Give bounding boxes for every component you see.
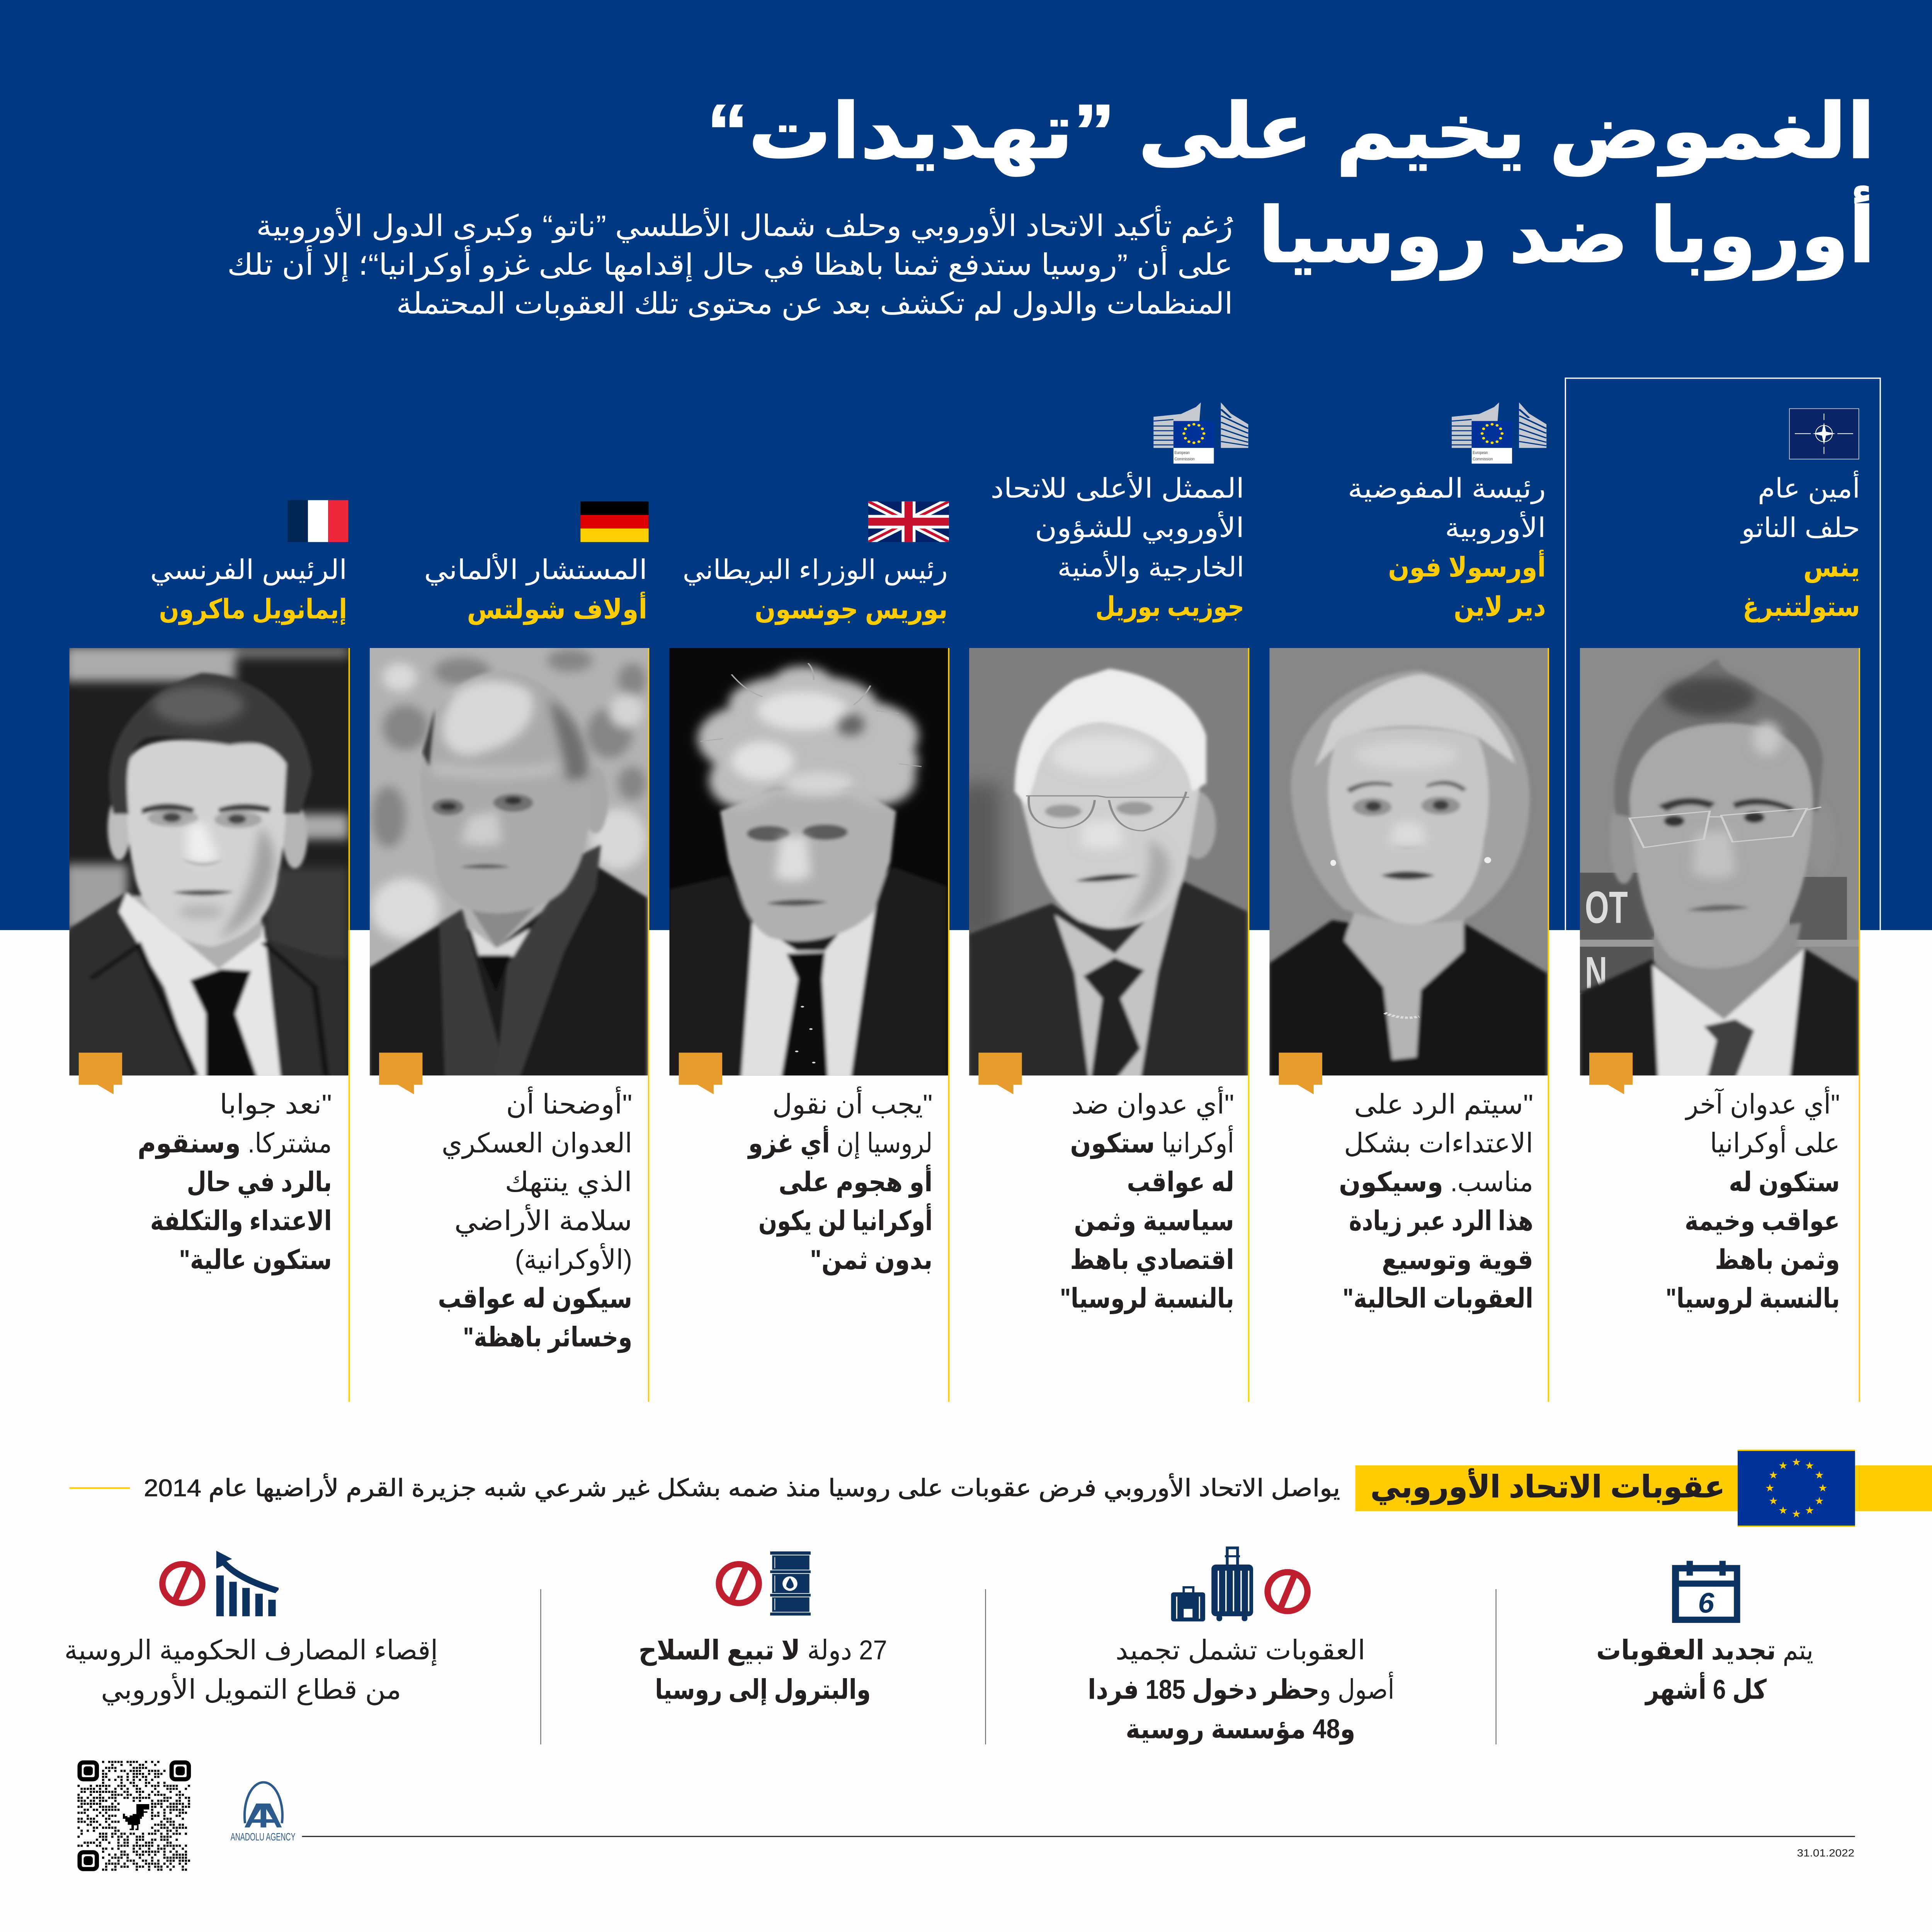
portrait: von der Leyen — [1266, 644, 1552, 1079]
quote: Borrell: "أي عدوان ضد — [1071, 1087, 1234, 1121]
position and name: Borrell: جوزيب بوريل — [1095, 592, 1244, 622]
icon: quote bubble (Borrell) — [978, 1053, 1022, 1094]
title — [707, 89, 1875, 281]
section band: EU sanctions — [1355, 1450, 1932, 1527]
quote: Stoltenberg: بالنسبة لروسيا" — [1666, 1284, 1840, 1315]
position and name: Borrell — [991, 472, 1244, 622]
quote: Scholz: وخسائر باهظة" — [463, 1322, 632, 1353]
icon: calendar — [1672, 1561, 1740, 1623]
quote: von der Leyen: الاعتداءات بشكل — [1344, 1128, 1533, 1158]
quote: Scholz: "أوضحنا أن — [506, 1087, 632, 1121]
quote: Scholz: سيكون له عواقب — [438, 1284, 632, 1314]
icon: luggage with prohibition sign — [1171, 1548, 1308, 1621]
subtitle text block: المنظمات والدول لم تكشف بعد عن محتوى تلك العقوبات المحتملة — [396, 287, 1233, 321]
position and name: Johnson — [683, 555, 948, 625]
quote: von der Leyen: "سيتم الرد على — [1354, 1090, 1533, 1121]
highlight frame: NATO column — [1565, 378, 1880, 930]
text: asset freeze: العقوبات تشمل تجميد — [1116, 1635, 1366, 1666]
text: excluding Russian banks: من قطاع التمويل الأوروبي — [101, 1673, 401, 1706]
section heading: عقوبات الاتحاد الأوروبي — [1371, 1468, 1725, 1505]
text: no arms and oil sales: 27 دولة لا تبيع السلاح — [639, 1635, 887, 1666]
quote: Macron: الاعتداء والتكلفة — [150, 1206, 332, 1237]
position and name: Borrell: الخارجية والأمنية — [1058, 551, 1244, 583]
date: 31.01.2022 — [1797, 1847, 1854, 1859]
position and name: von der Leyen: دير لاين — [1454, 592, 1546, 622]
quote: Stoltenberg: ستكون له — [1729, 1167, 1840, 1198]
portrait: Stoltenberg: N — [1585, 948, 1607, 998]
portrait: Stoltenberg — [1575, 644, 1867, 1079]
text: asset freeze: و48 مؤسسة روسية — [1126, 1714, 1355, 1745]
position and name: von der Leyen — [1348, 474, 1546, 622]
text: no arms and oil sales: والبترول إلى روسيا — [655, 1675, 871, 1706]
position and name: Scholz: أولاف شولتس — [467, 591, 647, 625]
portrait: Stoltenberg: OT — [1585, 882, 1628, 933]
text: no arms and oil sales — [639, 1635, 887, 1706]
icon: quote bubble (Stoltenberg) — [1589, 1053, 1633, 1094]
position and name: Johnson: رئيس الوزراء البريطاني — [683, 555, 948, 586]
quote: Macron — [138, 1090, 332, 1276]
text: sanctions renewal — [1596, 1635, 1813, 1705]
quote: Johnson: لروسيا إن أي غزو — [747, 1125, 932, 1159]
dividers — [541, 1589, 1496, 1744]
quote: Macron: ستكون عالية" — [179, 1245, 332, 1276]
QR code — [78, 1762, 191, 1870]
icon: quote bubble (Scholz) — [379, 1053, 422, 1094]
position and name: Stoltenberg: ستولتنبرغ — [1743, 592, 1860, 622]
quote: Stoltenberg: عواقب وخيمة — [1685, 1206, 1840, 1237]
text: sanctions renewal: كل 6 أشهر — [1645, 1672, 1767, 1705]
quote: Johnson: "يجب أن نقول — [772, 1087, 932, 1121]
quote: Stoltenberg: وثمن باهظ — [1715, 1245, 1840, 1276]
quote: Macron: مشتركا. وسنقوم — [138, 1128, 332, 1159]
text: asset freeze — [1088, 1635, 1395, 1745]
position and name: Stoltenberg: حلف الناتو — [1740, 513, 1860, 544]
portrait: Johnson — [666, 644, 956, 1079]
quote: Johnson: أوكرانيا لن يكون — [759, 1203, 932, 1237]
Anadolu Agency logo — [231, 1782, 296, 1843]
quote: von der Leyen — [1339, 1090, 1533, 1314]
icon: European Commission logo (Borrell column) — [1153, 402, 1248, 464]
position and name: Borrell: الأوروبي للشؤون — [1035, 511, 1244, 544]
quote: Scholz: العدوان العسكري — [442, 1128, 632, 1159]
text: sanctions renewal: يتم تجديد العقوبات — [1596, 1635, 1813, 1666]
yellow dash — [70, 1487, 130, 1489]
icon: falling bars with arrow and prohibition sign — [162, 1551, 279, 1616]
icon: French flag — [288, 500, 348, 542]
icon: European Commission logo (von der Leyen column) — [1452, 402, 1546, 464]
quote: von der Leyen: مناسب. وسيكون — [1339, 1167, 1533, 1198]
footer rule — [302, 1836, 1855, 1837]
quote: Macron: "نعد جوابا — [219, 1090, 332, 1121]
quote: Stoltenberg: على أوكرانيا — [1710, 1125, 1840, 1159]
icon: European Commission logo (Borrell column): European — [1175, 450, 1190, 455]
quote: Borrell: بالنسبة لروسيا" — [1060, 1284, 1234, 1315]
Anadolu Agency logo: ANADOLU AGENCY — [231, 1831, 296, 1843]
quote: Borrell: أوكرانيا ستكون — [1070, 1125, 1234, 1159]
icon: quote bubble (Macron) — [79, 1053, 122, 1094]
position and name: Borrell: الممثل الأعلى للاتحاد — [991, 472, 1244, 504]
portrait: Scholz — [366, 644, 655, 1079]
text: asset freeze: أصول وحظر دخول 185 فردا — [1088, 1672, 1395, 1706]
position and name: Stoltenberg: ينس — [1803, 553, 1860, 583]
subtitle text block: على أن ”روسيا ستدفع ثمنا باهظا في حال إقدامها على غزو أوكرانيا“؛ إلا أن تلك — [227, 245, 1233, 282]
quote: Macron: بالرد في حال — [187, 1167, 332, 1198]
position and name: von der Leyen: رئيسة المفوضية — [1348, 474, 1546, 505]
position and name: Stoltenberg: أمين عام — [1758, 471, 1860, 505]
quote: Johnson — [747, 1087, 932, 1276]
icon: European Commission logo (von der Leyen column): European — [1473, 450, 1488, 455]
icon: European Commission logo (Borrell column): Commission — [1175, 457, 1195, 462]
quote: von der Leyen: هذا الرد عبر زيادة — [1349, 1206, 1533, 1236]
column rules — [349, 648, 1859, 1402]
quote: Johnson: أو هجوم على — [779, 1164, 932, 1198]
title: الغموض يخيم على ”تهديدات“ — [707, 89, 1875, 176]
icon: quote bubble (von der Leyen) — [1279, 1053, 1322, 1094]
quote: Stoltenberg: "أي عدوان آخر — [1685, 1087, 1840, 1121]
quote: Stoltenberg — [1666, 1087, 1840, 1315]
blue header panel — [0, 0, 1932, 930]
quote: von der Leyen: قوية وتوسيع — [1382, 1245, 1533, 1276]
position and name: Johnson: بوريس جونسون — [755, 594, 948, 625]
position and name: Stoltenberg — [1740, 471, 1860, 622]
subtitle text block — [227, 206, 1233, 321]
icon: EU flag — [1738, 1450, 1855, 1527]
quote: Borrell — [1060, 1087, 1234, 1315]
subtitle text block: رُغم تأكيد الاتحاد الأوروبي وحلف شمال الأطلسي ”ناتو“ وكبرى الدول الأوروبية — [256, 206, 1233, 243]
quote: Scholz: الذي ينتهك — [505, 1167, 632, 1198]
icon: European Commission logo (von der Leyen column): Commission — [1473, 457, 1493, 462]
position and name: von der Leyen: أورسولا فون — [1388, 549, 1546, 583]
quote: Borrell: له عواقب — [1127, 1167, 1234, 1198]
position and name: Macron: إيمانويل ماكرون — [159, 594, 347, 625]
icon: quote bubble (Johnson) — [679, 1053, 722, 1094]
position and name: von der Leyen: الأوروبية — [1445, 511, 1546, 544]
quote: Borrell: سياسية وثمن — [1074, 1206, 1234, 1237]
icon: UK flag — [868, 502, 949, 542]
quote: von der Leyen: العقوبات الحالية" — [1343, 1284, 1533, 1314]
icon: German flag — [580, 502, 649, 542]
position and name: Macron: الرئيس الفرنسي — [150, 555, 347, 586]
icon: oil barrel with prohibition sign — [719, 1551, 811, 1616]
icon: NATO flag — [1789, 409, 1859, 459]
quote: Scholz — [438, 1087, 632, 1353]
text: excluding Russian banks — [65, 1635, 438, 1706]
text: excluding Russian banks: إقصاء المصارف الحكومية الروسية — [65, 1635, 438, 1666]
title: أوروبا ضد روسيا — [1258, 186, 1875, 281]
position and name: Macron — [150, 555, 347, 625]
position and name: Scholz: المستشار الألماني — [424, 553, 647, 586]
quote: Scholz: (الأوكرانية) — [515, 1243, 632, 1276]
portrait: Macron — [65, 644, 354, 1079]
quote: Scholz: سلامة الأراضي — [454, 1204, 632, 1237]
intro sentence: يواصل الاتحاد الأوروبي فرض عقوبات على روسيا منذ ضمه بشكل غير شرعي شبه جزيرة القرم لأراضيها عام 2014 — [144, 1473, 1340, 1502]
icon: dinosaur — [123, 1804, 149, 1830]
portrait: Borrell — [954, 644, 1252, 1079]
quote: Borrell: اقتصادي باهظ — [1070, 1245, 1234, 1276]
position and name: Scholz — [424, 553, 647, 625]
icon: calendar: 6 — [1698, 1587, 1714, 1619]
quote: Johnson: بدون ثمن" — [810, 1245, 932, 1276]
